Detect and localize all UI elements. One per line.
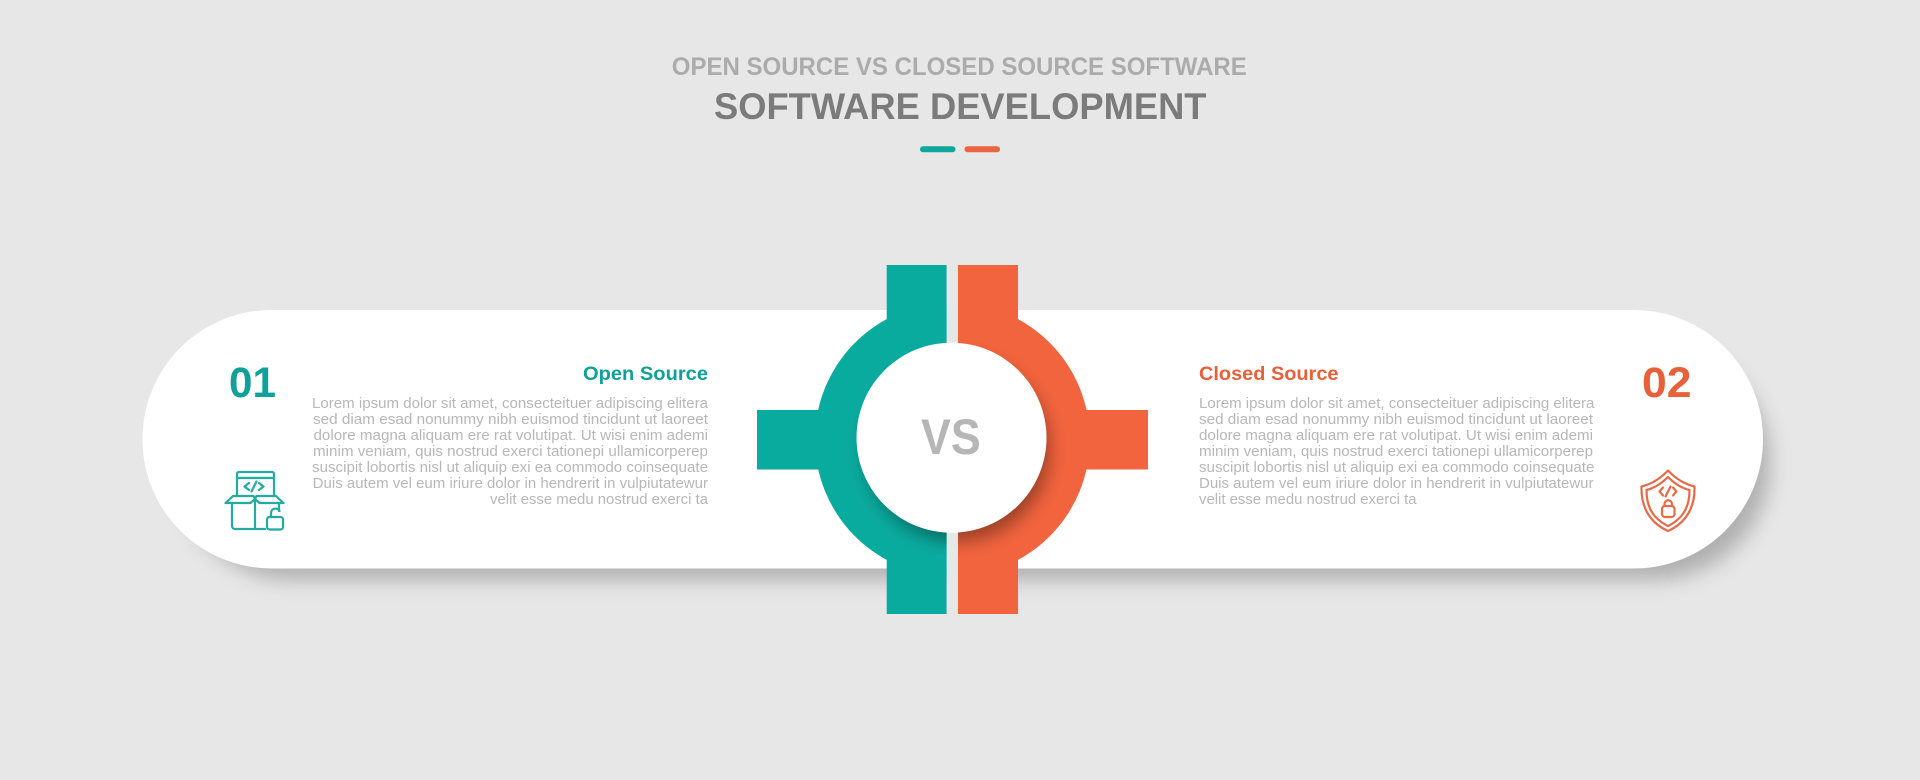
heading: open source: Open Source [583, 363, 708, 385]
body text: closed source: minim veniam, quis nostrud exerci tationepi ullamicorperep [1199, 444, 1593, 460]
body text: open source: minim veniam, quis nostrud exerci tationepi ullamicorperep [313, 444, 708, 460]
body text: open source [312, 396, 709, 508]
body text: closed source: Duis autem vel eum iriure dolor in hendrerit in vulpiutatewur [1199, 476, 1594, 492]
comparison panel [142, 310, 1763, 568]
body text: open source: sed diam esad nonummy nibh euismod tincidunt ut laoreet [313, 412, 708, 428]
body text: closed source: dolore magna aliquam ere rat volutipat. Ut wisi enim ademi [1199, 428, 1593, 444]
body text: closed source: Lorem ipsum dolor sit amet, consecteituer adipiscing elitera [1199, 396, 1595, 412]
inner circle shadow [865, 357, 1049, 541]
icon: open box with code and unlocked padlock [226, 472, 284, 530]
body text: open source: velit esse medu nostrud exerci ta [490, 492, 709, 508]
center vs emblem [757, 265, 1148, 614]
center gap between halves [947, 265, 958, 614]
panel shadow [176, 345, 1770, 580]
inner white circle [856, 343, 1046, 533]
teal half ring with bars [757, 265, 947, 614]
icon: shield with code and padlock [1641, 470, 1695, 531]
vs label: VS [921, 409, 981, 465]
body text: closed source [1199, 396, 1595, 508]
subtitle: OPEN SOURCE VS CLOSED SOURCE SOFTWARE [672, 53, 1247, 81]
number 01: 01 [229, 359, 276, 407]
title accent dashes [920, 146, 1000, 152]
left card: open source [226, 359, 709, 530]
body text: open source: dolore magna aliquam ere rat volutipat. Ut wisi enim ademi [314, 428, 708, 444]
body text: closed source: sed diam esad nonummy nibh euismod tincidunt ut laoreet [1199, 412, 1593, 428]
title block [672, 53, 1247, 152]
body text: open source: Lorem ipsum dolor sit amet, consecteituer adipiscing elitera [312, 396, 709, 412]
number 02: 02 [1642, 359, 1692, 407]
body text: open source: suscipit lobortis nisl ut aliquip exi ea commodo coinsequate [312, 460, 708, 476]
body text: closed source: suscipit lobortis nisl ut aliquip exi ea commodo coinsequate [1199, 460, 1594, 476]
orange half ring with bars [958, 265, 1148, 614]
body text: open source: Duis autem vel eum iriure dolor in hendrerit in vulpiutatewur [313, 476, 708, 492]
body text: closed source: velit esse medu nostrud exerci ta [1199, 492, 1417, 508]
heading: closed source: Closed Source [1199, 363, 1339, 385]
main title: SOFTWARE DEVELOPMENT [714, 86, 1207, 127]
right card: closed source [1199, 359, 1695, 531]
